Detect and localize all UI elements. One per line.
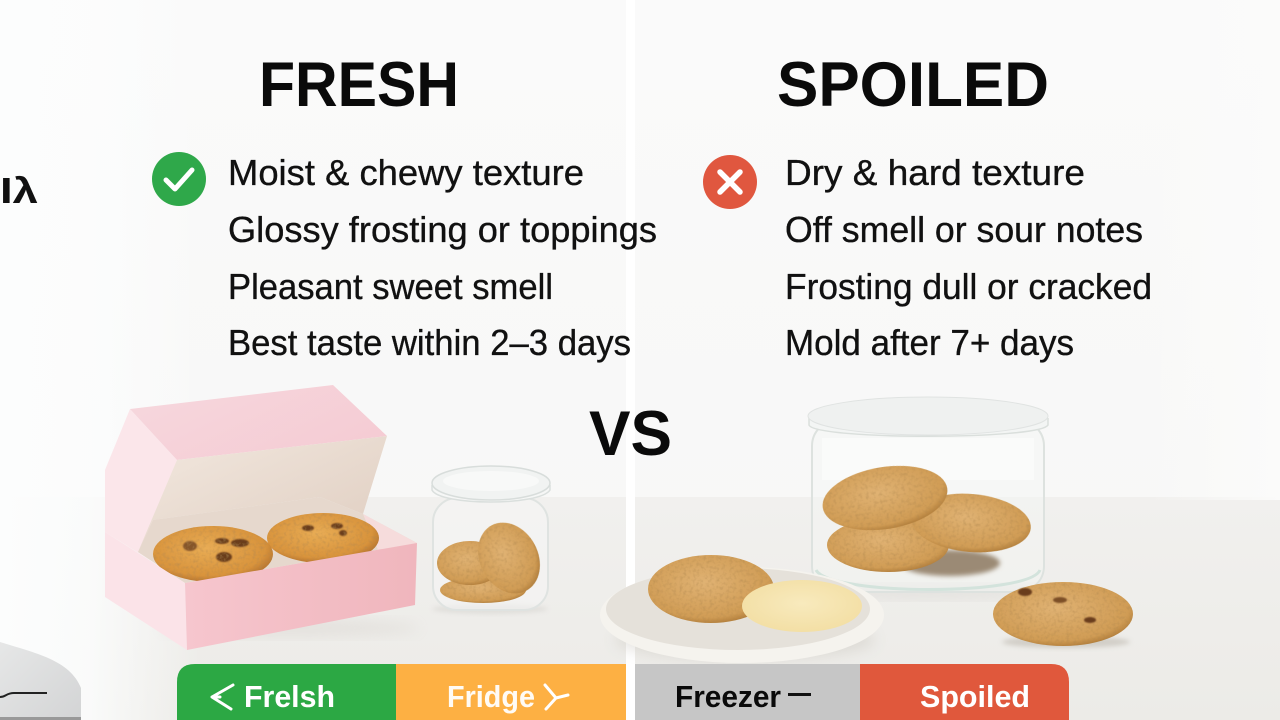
fresh list: Moist & chewy texture (228, 152, 584, 193)
segment: spoiled: Spoiled (920, 679, 1030, 714)
fresh list: Glossy frosting or toppings (228, 209, 657, 250)
icon: red cross (703, 155, 757, 209)
cookie in box right (267, 513, 379, 563)
cropped side fragment: Iλ (0, 170, 38, 211)
plate with two cookies (600, 555, 884, 663)
segment: freezer (635, 664, 860, 720)
segment: fridge: Fridge (447, 679, 535, 714)
grey shape bottom left (0, 642, 81, 720)
heading: spoiled: SPOILED (777, 50, 1049, 120)
vs label: VS (589, 399, 672, 469)
fresh list (228, 152, 657, 363)
segment: fresh: Frelsh (244, 679, 335, 714)
icon: green check (152, 152, 206, 206)
pink cookie box (105, 385, 420, 650)
loose cookie (993, 582, 1133, 648)
spoiled list (785, 152, 1152, 363)
spoiled list: Mold after 7+ days (785, 322, 1074, 363)
segment: freezer: Freezer (675, 679, 781, 714)
segment: spoiled (860, 664, 1069, 720)
spoiled list: Frosting dull or cracked (785, 266, 1152, 307)
cookie in box left (153, 526, 273, 582)
fresh list: Best taste within 2–3 days (228, 322, 631, 363)
stage bar (177, 664, 1069, 720)
segment: fridge (396, 664, 626, 720)
segment: fresh (177, 664, 396, 720)
small glass jar (432, 466, 552, 614)
fresh list: Pleasant sweet smell (228, 266, 553, 307)
centre divider (626, 0, 635, 720)
spoiled list: Off smell or sour notes (785, 209, 1143, 250)
heading: fresh: FRESH (259, 50, 459, 120)
spoiled list: Dry & hard texture (785, 152, 1085, 193)
big glass jar (808, 397, 1050, 598)
